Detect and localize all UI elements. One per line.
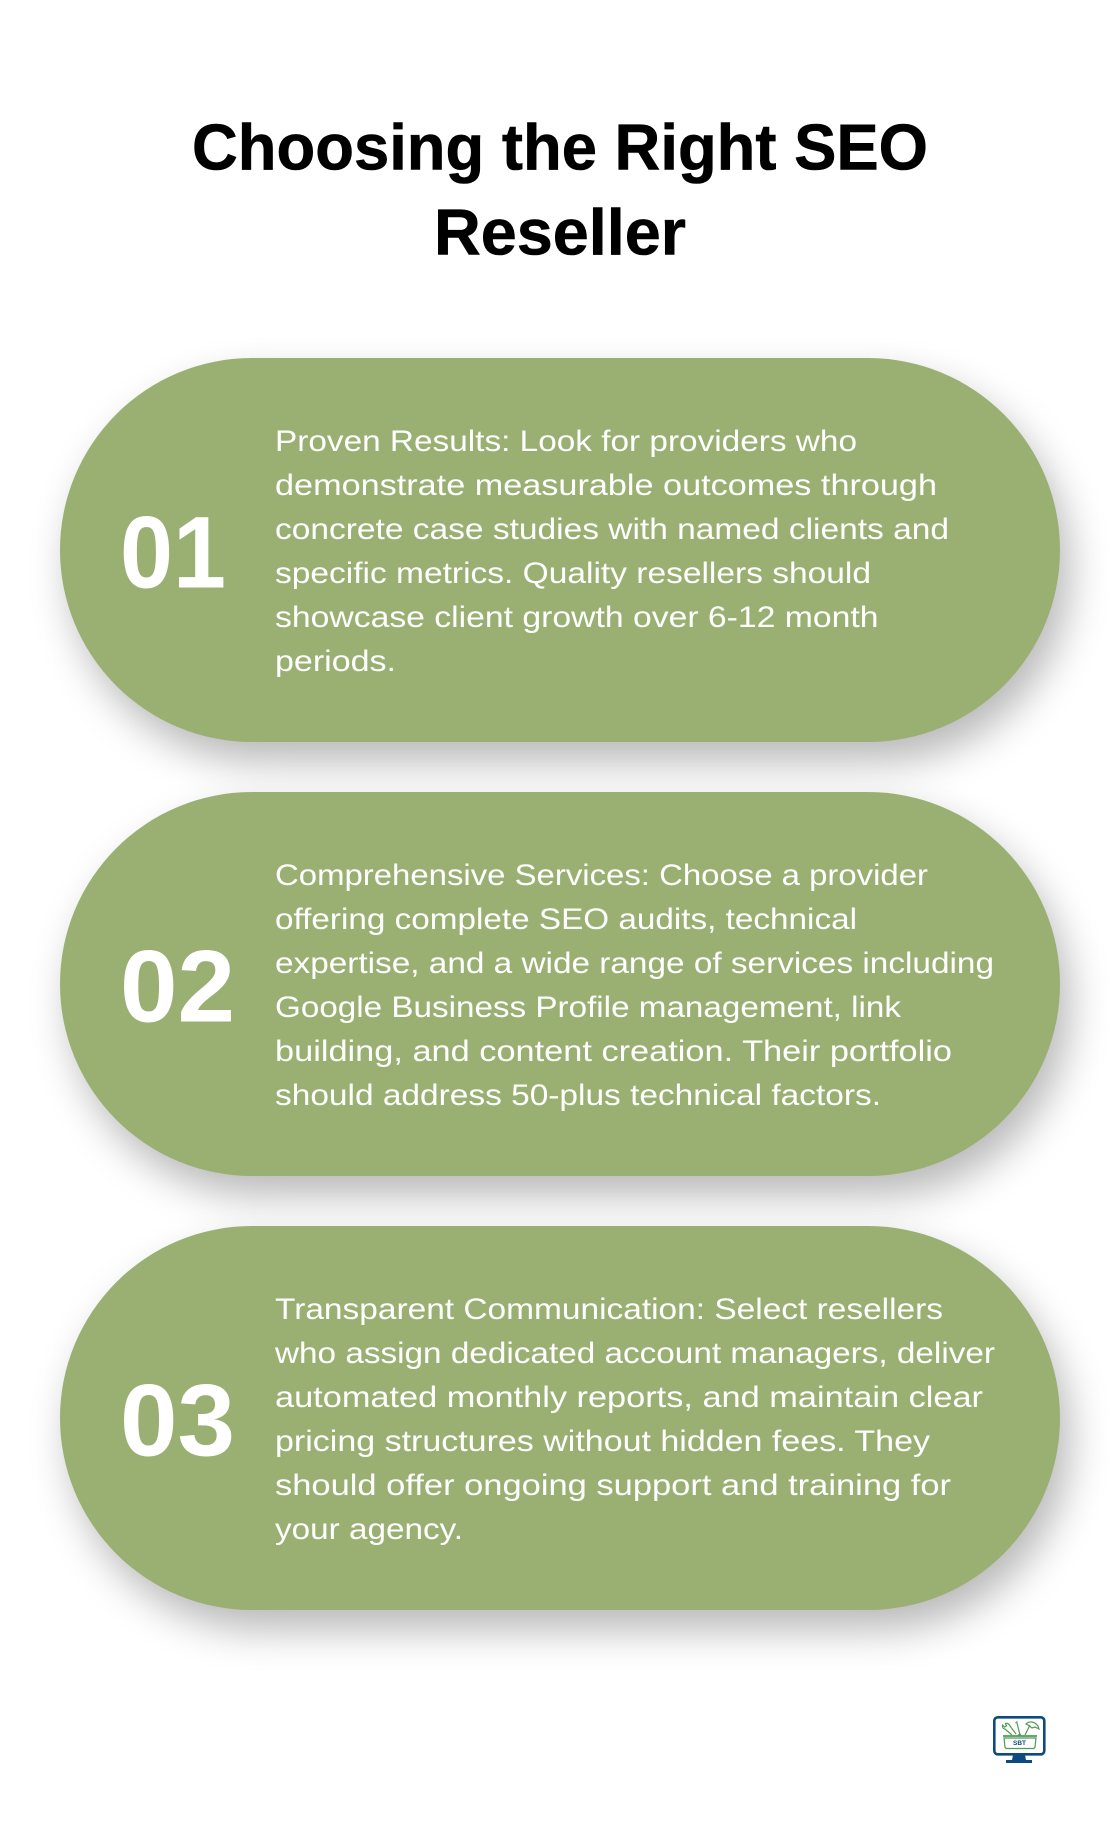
text: proven results xyxy=(275,425,949,678)
text: proven results: demonstrate measurable outcomes through xyxy=(275,469,937,502)
text: proven results: specific metrics. Quality resellers should xyxy=(275,557,871,590)
text: comprehensive services: expertise, and a wide range of services including xyxy=(275,947,994,980)
text: comprehensive services xyxy=(275,859,994,1112)
panel: step 01 proven results xyxy=(60,358,1060,742)
text: transparent communication: who assign dedicated account managers, deliver xyxy=(274,1337,995,1370)
panel: step 03 transparent communication xyxy=(60,1226,1060,1610)
text: comprehensive services: Comprehensive Services: Choose a provider xyxy=(275,859,928,892)
text: proven results: concrete case studies with named clients and xyxy=(275,513,949,546)
text: comprehensive services: offering complete SEO audits, technical xyxy=(275,903,857,936)
text: proven results: periods. xyxy=(275,645,396,678)
text: comprehensive services: building, and content creation. Their portfolio xyxy=(275,1035,952,1068)
text: comprehensive services: should address 50-plus technical factors. xyxy=(275,1079,881,1112)
text: proven results: showcase client growth over 6-12 month xyxy=(275,601,878,634)
step number 01: 01 xyxy=(120,496,226,610)
title: Choosing the Right SEO xyxy=(192,110,928,184)
text: transparent communication: Transparent Communication: Select resellers xyxy=(275,1293,943,1326)
step number 02: 02 xyxy=(120,930,235,1044)
title: Reseller xyxy=(434,196,686,268)
title xyxy=(192,110,928,268)
icon: monitor with toolbox logo: SBT xyxy=(1013,1740,1026,1747)
text: transparent communication: automated monthly reports, and maintain clear xyxy=(275,1381,983,1414)
step number 03: 03 xyxy=(120,1364,235,1478)
text: transparent communication: should offer ongoing support and training for xyxy=(275,1469,951,1502)
text: transparent communication: pricing structures without hidden fees. They xyxy=(275,1425,930,1458)
icon: monitor with toolbox logo xyxy=(993,1716,1046,1763)
text: proven results: Proven Results: Look for providers who xyxy=(275,425,857,458)
text: transparent communication: your agency. xyxy=(275,1513,463,1546)
text: comprehensive services: Google Business Profile management, link xyxy=(275,991,902,1024)
text: transparent communication xyxy=(274,1293,995,1546)
panel: step 02 comprehensive services xyxy=(60,792,1060,1176)
